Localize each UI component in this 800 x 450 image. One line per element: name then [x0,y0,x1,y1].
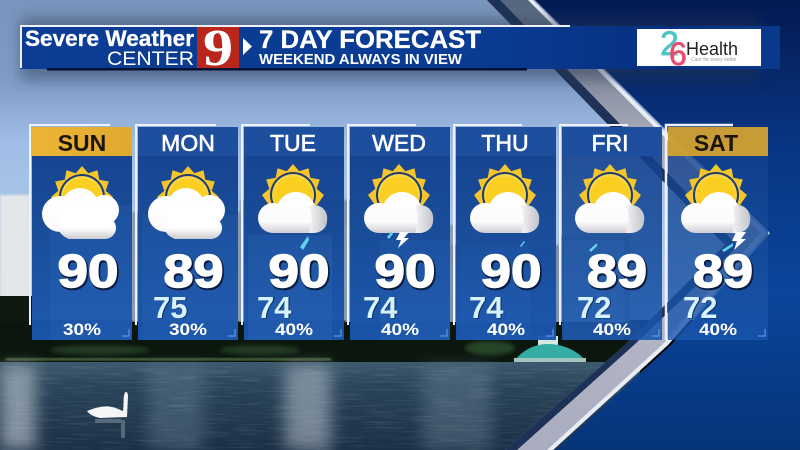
sponsor logo: 26 Health [637,25,761,72]
high temperature: 89 [587,245,647,297]
day label: SUN [58,130,106,156]
high temperature: 90 [270,246,330,298]
icon: sun, cloud, rain and lightning [364,164,433,248]
day header [32,127,132,156]
low temperature: 75 [153,290,187,325]
icon: sun, cloud and rain [470,164,539,247]
panel: Wednesday [348,125,450,340]
panel: Tuesday [242,125,344,340]
high temperature: 90 [268,245,330,297]
high temperature: 90 [376,246,436,298]
rain chance: 30% [63,321,101,339]
background: tower buildings [0,195,630,325]
panel: Thursday [454,125,556,340]
day header [668,127,768,156]
high temperature: 90 [374,245,436,297]
channel 9 logo [197,20,239,77]
low temperature: 72 [577,290,611,325]
sponsor logo: 26 Health: 2 [660,25,679,63]
panel: Monday [136,125,238,340]
day label: MON [161,130,215,156]
dark blue right panel [535,0,800,450]
high temperature: 89 [694,246,754,298]
header bar [20,20,780,77]
rain chance: 40% [593,321,631,339]
low temperature: 74 [364,290,399,326]
panel: Friday [560,125,662,340]
water reflections [0,366,640,450]
panel: Sunday [30,125,132,340]
station title: CENTER [107,49,194,70]
day header [562,127,662,156]
channel 9 logo: 9 [203,20,233,77]
low temperature: 74 [257,290,292,325]
background: green shoreline [6,358,331,360]
panel: Saturday [666,125,768,340]
rain chance: 30% [169,321,207,339]
sponsor logo: 26 Health: 6 [669,36,687,72]
day header [350,127,450,156]
day header [244,127,344,156]
day label: WED [372,130,426,156]
icon: sun and cloud [42,166,119,239]
low temperature: 74 [470,290,505,326]
high temperature: 90 [480,245,542,297]
icon: sun, cloud and rain [575,164,644,252]
swan [87,392,128,438]
fountain [514,336,586,362]
low temperature: 74 [363,290,398,325]
rain chance: 40% [381,321,419,339]
high temperature: 90 [482,246,542,298]
headline: 7 DAY FORECAST [259,26,481,54]
icon: sun and cloud [148,166,225,239]
day header [456,127,556,156]
low temperature: 74 [469,290,504,325]
day label: SAT [694,130,738,156]
arrow [243,38,252,55]
high temperature: 90 [58,246,120,298]
header shadow [20,18,760,80]
low temperature: 75 [154,290,188,326]
high temperature: 89 [164,245,224,297]
rain chance: 40% [699,321,737,339]
high temperature: 90 [58,245,118,297]
low temperature: 74 [258,290,293,326]
background: lake water [0,362,640,450]
station title: Severe Weather [25,26,194,51]
sponsor logo: 26 Health: Care for every better [691,57,737,63]
low temperature: 72 [684,290,718,326]
high temperature: 89 [693,245,753,297]
high temperature: 89 [588,246,648,298]
day label: THU [481,130,529,156]
diagonal band [487,0,767,450]
high temperature: 89 [164,246,224,298]
subheadline: WEEKEND ALWAYS IN VIEW [259,51,463,68]
day header [138,127,238,156]
icon: sun, cloud, rain and lightning [681,164,750,252]
rain chance: 40% [275,321,313,339]
sponsor logo: 26 Health: Health [686,39,738,59]
icon: sun, cloud and rain [258,164,327,250]
background: lake photo sky [0,0,800,320]
day label: TUE [270,130,316,156]
background: tree line [0,296,640,364]
low temperature: 72 [578,290,612,326]
rain chance: 40% [487,321,525,339]
day label: FRI [591,130,629,156]
low temperature: 72 [683,290,717,325]
station title [25,26,194,70]
